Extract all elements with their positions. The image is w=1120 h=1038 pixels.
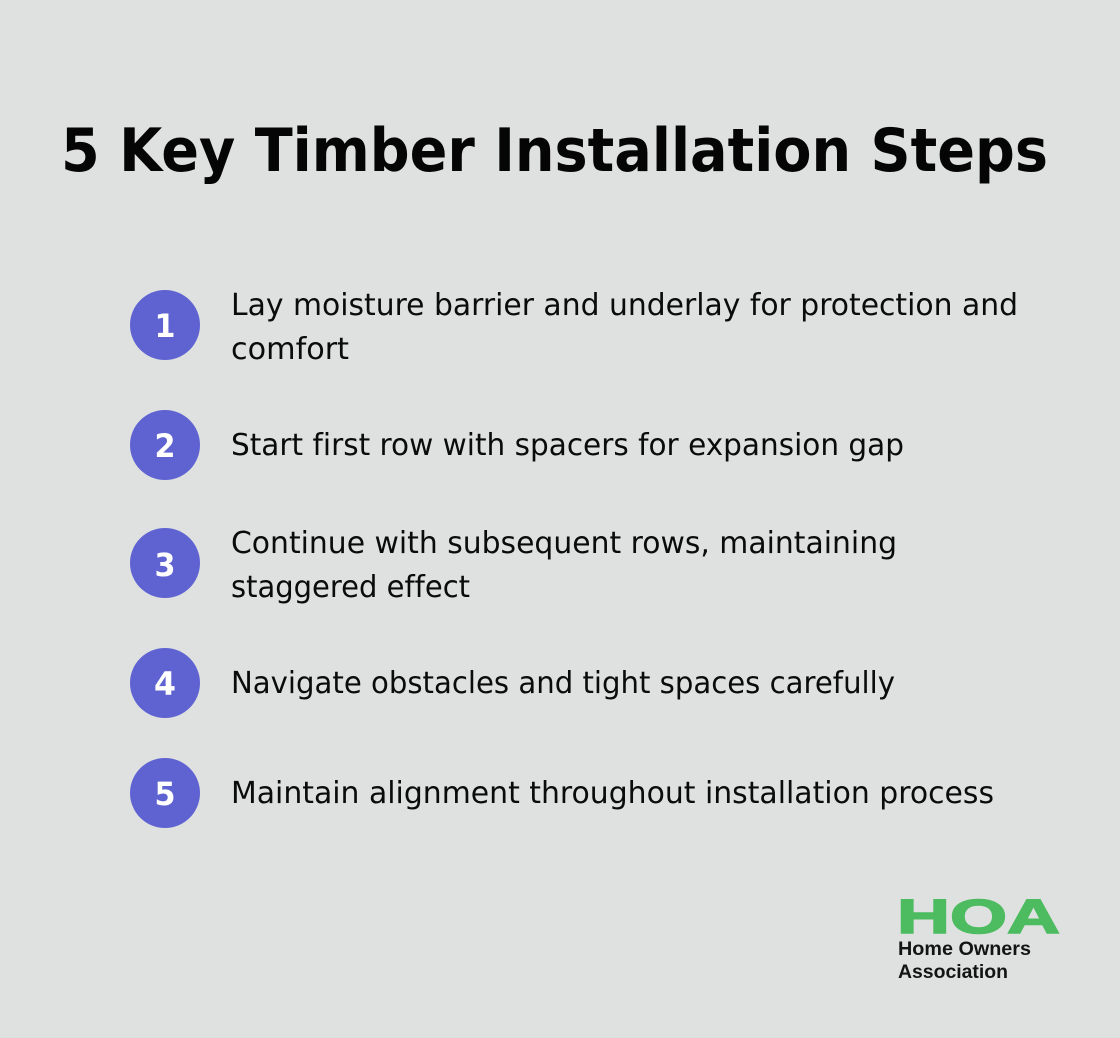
- step 3 badge: 3: [154, 546, 176, 584]
- step 4 badge: 4: [154, 665, 176, 703]
- logo caption: Association: [898, 962, 1008, 983]
- step 2 badge: 2: [154, 427, 176, 465]
- step 3 text: [231, 526, 897, 605]
- step 3 badge: [130, 528, 200, 598]
- step 4 text: Navigate obstacles and tight spaces carefully: [231, 666, 895, 701]
- step 5 text: Maintain alignment throughout installation process: [231, 776, 994, 811]
- step 5 badge: [130, 758, 200, 828]
- logo caption: Home Owners: [898, 939, 1031, 960]
- step 4 badge: [130, 648, 200, 718]
- step 3 text: staggered effect: [231, 570, 470, 605]
- step 1: [130, 288, 1018, 367]
- step 2 badge: [130, 410, 200, 480]
- step 1 text: comfort: [231, 332, 349, 367]
- step 3 text: Continue with subsequent rows, maintaining: [231, 526, 897, 561]
- step 5 badge: 5: [154, 775, 176, 813]
- step 1 text: Lay moisture barrier and underlay for protection and: [231, 288, 1018, 323]
- step 1 badge: 1: [154, 307, 176, 345]
- step 1 text: [231, 288, 1018, 367]
- step 4: [130, 648, 895, 718]
- logo caption: [898, 939, 1031, 983]
- step 3: [130, 526, 897, 605]
- step 2: [130, 410, 904, 480]
- step 5: [130, 758, 994, 828]
- logo wordmark HOA: HOA: [897, 891, 1060, 944]
- logo: Home Owners Association: [897, 891, 1060, 983]
- title: 5 Key Timber Installation Steps: [61, 116, 1048, 186]
- step 1 badge: [130, 290, 200, 360]
- step 2 text: Start first row with spacers for expansion gap: [231, 428, 904, 463]
